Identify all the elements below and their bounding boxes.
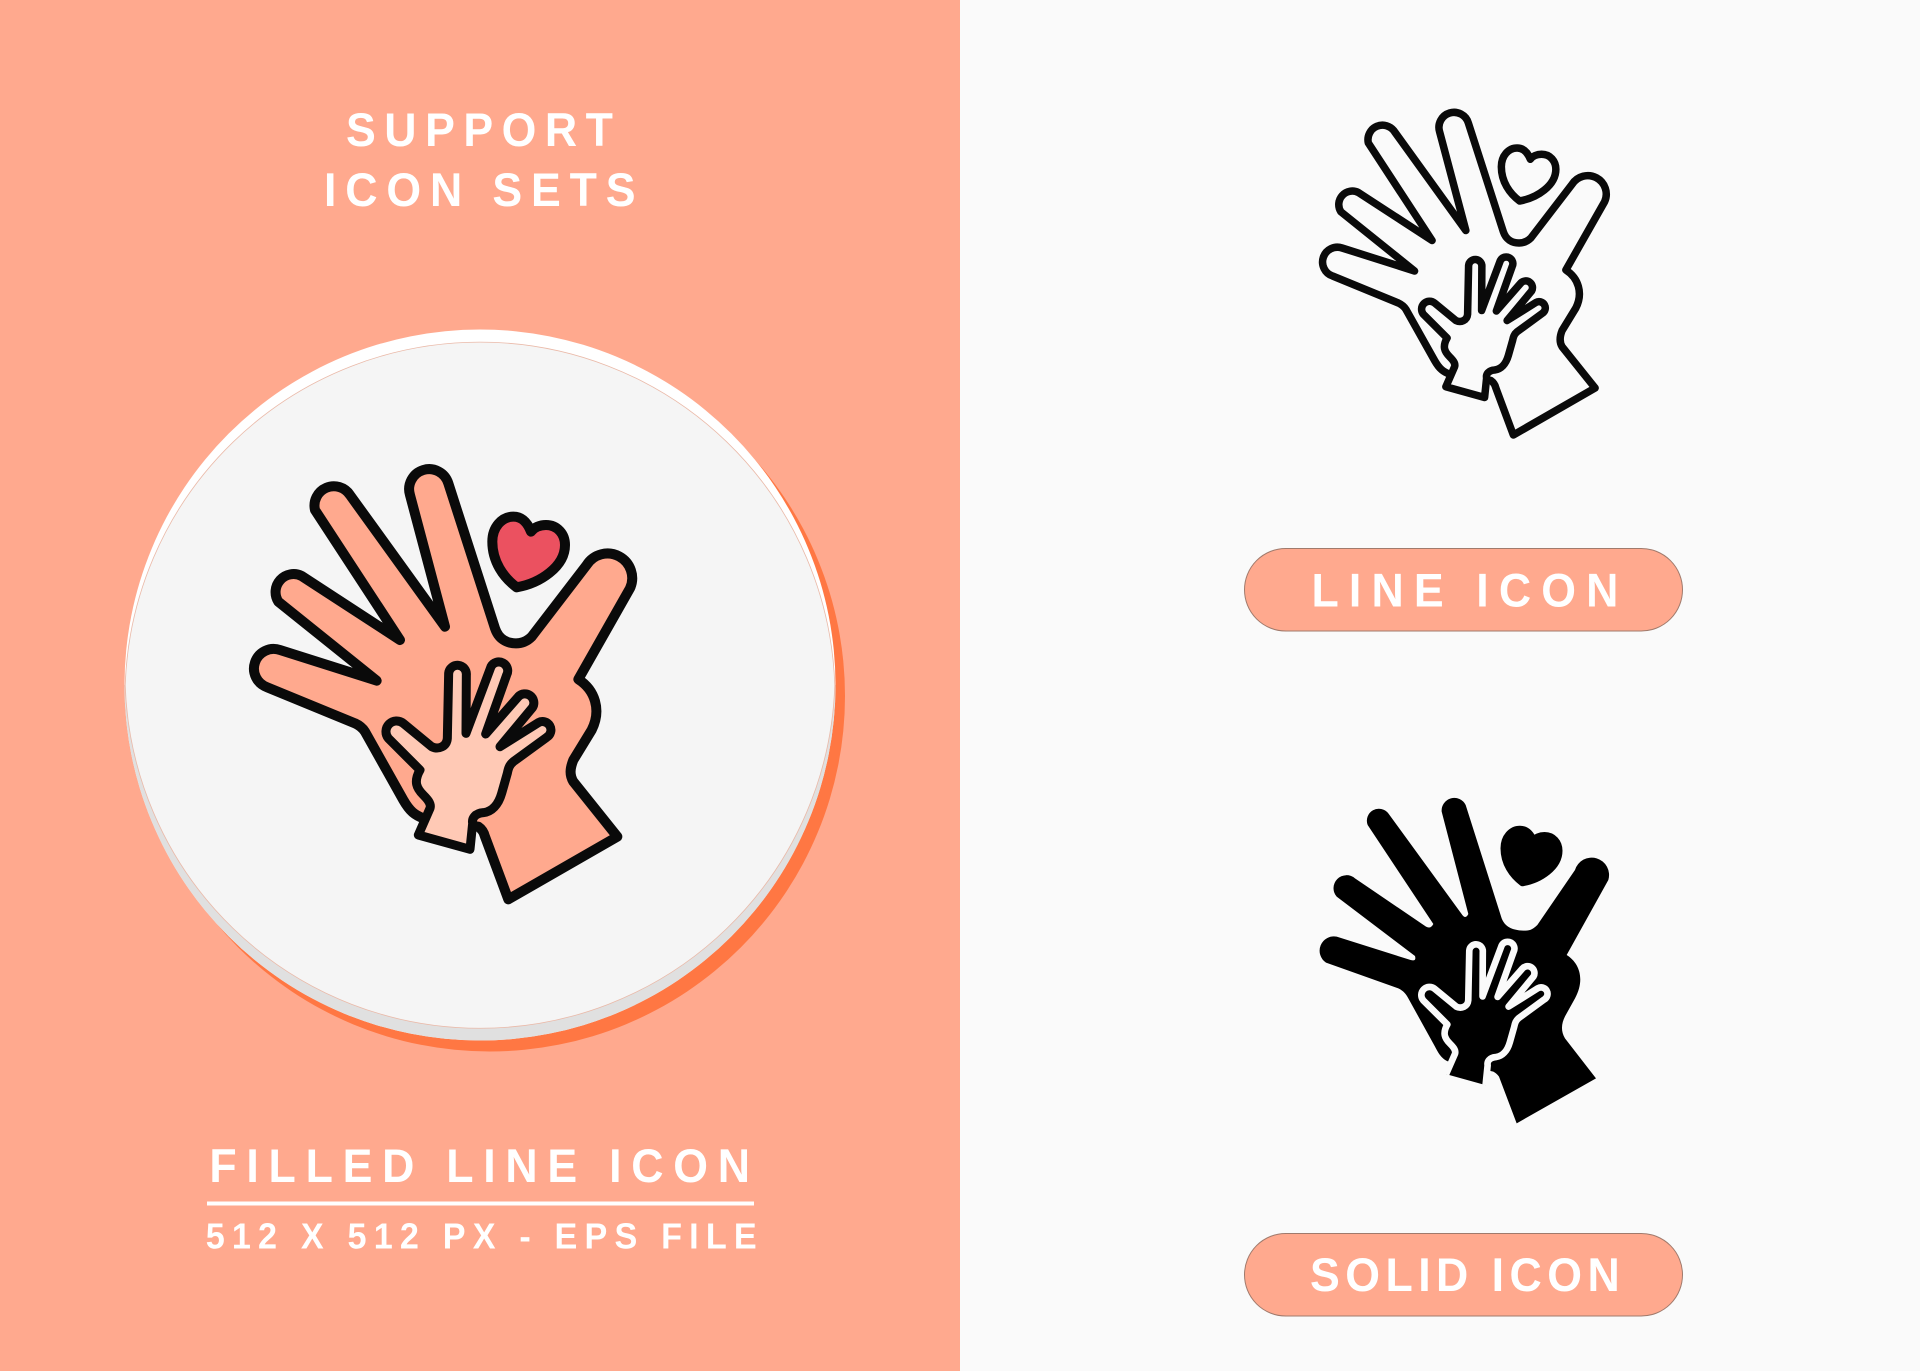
small hand bbox=[386, 662, 551, 849]
solid big hand bbox=[1320, 798, 1609, 1123]
label pill: line icon: LINE ICON bbox=[1312, 564, 1618, 617]
label pill: line icon bbox=[1244, 548, 1682, 631]
badge: circular icon disc bbox=[124, 330, 845, 1052]
label pill: solid icon bbox=[1244, 1234, 1682, 1316]
title: support icon sets bbox=[324, 104, 636, 216]
big hand bbox=[254, 469, 632, 899]
label pill: solid icon: SOLID ICON bbox=[1310, 1249, 1620, 1301]
footer heading: filled line icon bbox=[206, 1140, 757, 1257]
footer heading: filled line icon: FILLED LINE ICON bbox=[209, 1140, 750, 1192]
footer heading: filled line icon: 512 X 512 PX - EPS FILE bbox=[206, 1217, 757, 1257]
heart bbox=[492, 517, 565, 587]
title: support icon sets: ICON SETS bbox=[324, 164, 636, 216]
panel: left salmon panel bbox=[0, 0, 960, 1371]
solid small hand bbox=[1421, 942, 1548, 1085]
icon: line version bbox=[1323, 112, 1606, 435]
solid heart bbox=[1504, 830, 1559, 882]
icon: filled line hands with heart bbox=[254, 469, 632, 899]
icon: solid version bbox=[1320, 798, 1609, 1123]
title: support icon sets: SUPPORT bbox=[346, 104, 613, 156]
